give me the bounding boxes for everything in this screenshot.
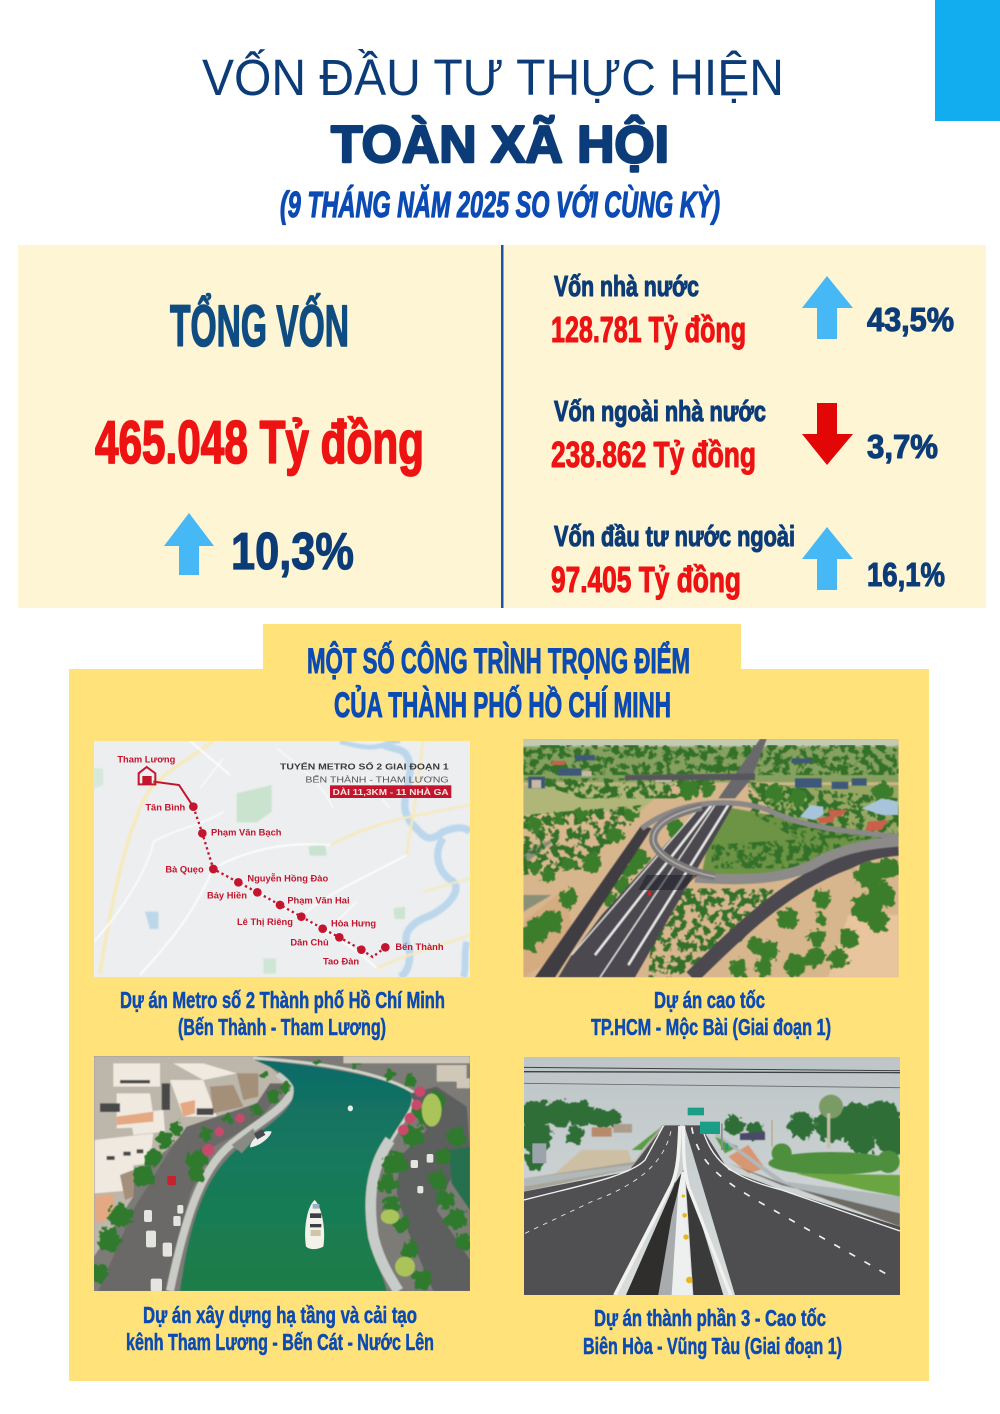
title: TOÀN XÃ HỘI bbox=[331, 115, 669, 174]
state capital label: Vốn nhà nước bbox=[554, 271, 699, 303]
non-state change: 3,7% bbox=[867, 428, 938, 465]
caption: expressway Moc Bai bbox=[591, 987, 831, 1040]
greenery bbox=[91, 1058, 471, 1290]
roads bbox=[535, 739, 899, 977]
subtitle: (9 THÁNG NĂM 2025 SO VỚI CÙNG KỲ) bbox=[280, 184, 720, 225]
roadside earth bbox=[728, 1145, 765, 1173]
state capital value: 128.781 Tỷ đồng bbox=[551, 309, 746, 350]
total capital heading: TỔNG VỐN bbox=[170, 294, 349, 359]
panel: capital totals bbox=[18, 245, 986, 608]
map title bbox=[280, 761, 451, 798]
image: expressway interchange bbox=[518, 739, 900, 978]
icon: up arrow foreign bbox=[802, 527, 853, 590]
tree lines bbox=[518, 1099, 907, 1170]
map labels: Bảy Hiền bbox=[207, 891, 247, 901]
map labels: Lê Thị Riêng bbox=[237, 917, 293, 927]
map labels: Tao Đàn bbox=[323, 956, 359, 966]
foreign capital value: 97.405 Tỷ đồng bbox=[551, 559, 741, 600]
right far buildings bbox=[343, 1056, 470, 1088]
corner accent block bbox=[935, 0, 1000, 121]
foreign change: 16,1% bbox=[867, 556, 945, 593]
panel: key projects bbox=[69, 624, 929, 1381]
map stations bbox=[189, 802, 390, 954]
map labels: Hòa Hưng bbox=[331, 918, 376, 928]
state change: 43,5% bbox=[867, 301, 954, 338]
icon: depot bbox=[139, 767, 155, 784]
image: Bien Hoa - Vung Tau expressway bbox=[518, 1057, 907, 1295]
caption: expressway Moc Bai: TP.HCM - Mộc Bài (Giai đoạn 1) bbox=[591, 1014, 831, 1040]
power lines bbox=[524, 1067, 900, 1088]
caption: expressway Bien Hoa: Dự án thành phần 3 - Cao tốc bbox=[594, 1305, 826, 1331]
caption: canal: Dự án xây dựng hạ tầng và cải tạo bbox=[143, 1302, 417, 1328]
median barrier bbox=[658, 1172, 692, 1295]
icon: down arrow non-state bbox=[802, 403, 853, 465]
map labels: Nguyễn Hồng Đào bbox=[247, 874, 328, 884]
gantry signs bbox=[532, 1108, 773, 1163]
left city bbox=[94, 1056, 290, 1257]
projects heading: MỘT SỐ CÔNG TRÌNH TRỌNG ĐIỂM bbox=[307, 641, 690, 681]
map labels: Bà Quẹo bbox=[165, 864, 204, 874]
water bbox=[180, 1059, 412, 1291]
icon: up arrow total bbox=[164, 513, 214, 575]
total capital value: 465.048 Tỷ đồng bbox=[95, 409, 424, 476]
icon: up arrow state bbox=[802, 276, 853, 339]
map labels: Dân Chủ bbox=[290, 937, 329, 947]
far bank bbox=[253, 1058, 414, 1143]
foreign capital label: Vốn đầu tư nước ngoài bbox=[554, 521, 795, 553]
title: VỐN ĐẦU TƯ THỰC HIỆN bbox=[202, 48, 784, 106]
image: Tham Luong canal bbox=[91, 1056, 471, 1291]
foliage texture bbox=[523, 745, 899, 977]
projects heading bbox=[307, 641, 690, 725]
carriageways bbox=[524, 1125, 680, 1295]
caption: expressway Bien Hoa: Biên Hòa - Vũng Tàu (Giai đoạn 1) bbox=[583, 1333, 842, 1359]
map labels: Bến Thành bbox=[395, 942, 444, 952]
non-state capital label: Vốn ngoài nhà nước bbox=[554, 396, 766, 428]
caption: canal bbox=[126, 1302, 434, 1355]
caption: metro: Dự án Metro số 2 Thành phố Hồ Chí Minh bbox=[120, 987, 445, 1013]
map labels: Tham Lương bbox=[117, 754, 176, 764]
map labels: Phạm Văn Hai bbox=[287, 896, 350, 906]
lane markings bbox=[524, 1126, 900, 1295]
cars bbox=[144, 1154, 433, 1291]
caption: metro bbox=[120, 987, 445, 1040]
boats bbox=[250, 1105, 353, 1249]
map title: TUYẾN METRO SỐ 2 GIAI ĐOẠN 1 bbox=[280, 761, 449, 772]
map title: BẾN THÀNH - THAM LƯƠNG bbox=[305, 775, 449, 785]
roadside verge and guardrails bbox=[524, 1125, 665, 1192]
houses bbox=[528, 755, 898, 832]
caption: metro: (Bến Thành - Tham Lương) bbox=[178, 1014, 386, 1040]
map labels bbox=[117, 754, 444, 966]
right road bbox=[397, 1087, 470, 1291]
map labels: Tân Bình bbox=[145, 803, 186, 813]
image: metro line 2 map bbox=[94, 741, 470, 977]
caption: canal: kênh Tham Lương - Bến Cát - Nước Lên bbox=[126, 1329, 434, 1355]
caption: expressway Moc Bai: Dự án cao tốc bbox=[654, 987, 765, 1013]
left road bbox=[98, 1083, 287, 1291]
projects heading: CỦA THÀNH PHỐ HỒ CHÍ MINH bbox=[334, 685, 671, 725]
total change: 10,3% bbox=[231, 523, 354, 581]
map title: DÀI 11,3KM - 11 NHÀ GA bbox=[333, 787, 450, 797]
map labels: Phạm Văn Bạch bbox=[211, 828, 282, 838]
caption: expressway Bien Hoa bbox=[583, 1305, 842, 1359]
left quay bbox=[170, 1073, 293, 1291]
trees bbox=[518, 780, 900, 978]
title bbox=[202, 48, 784, 174]
non-state capital value: 238.862 Tỷ đồng bbox=[551, 434, 756, 475]
map route bbox=[153, 782, 193, 807]
